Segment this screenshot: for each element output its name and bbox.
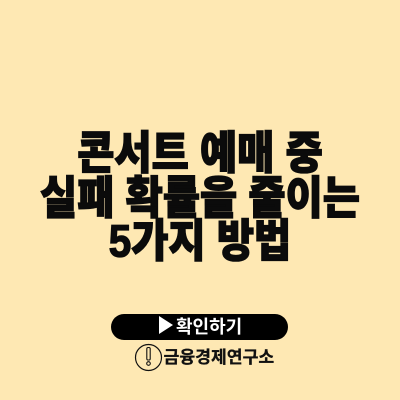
- brand: 금융경제연구소: [134, 344, 274, 372]
- brand name: 금융경제연구소: [164, 347, 274, 367]
- title: 5가지 방법: [109, 217, 291, 267]
- button label: 확인하기: [176, 317, 242, 337]
- icon: exclamation circle: [134, 344, 162, 372]
- title: [40, 129, 360, 267]
- icon: play triangle: [159, 316, 173, 334]
- button: confirm: [111, 314, 288, 340]
- title: 실패 확률을 줄이는: [40, 174, 360, 224]
- title: 콘서트 예매 중: [77, 129, 323, 179]
